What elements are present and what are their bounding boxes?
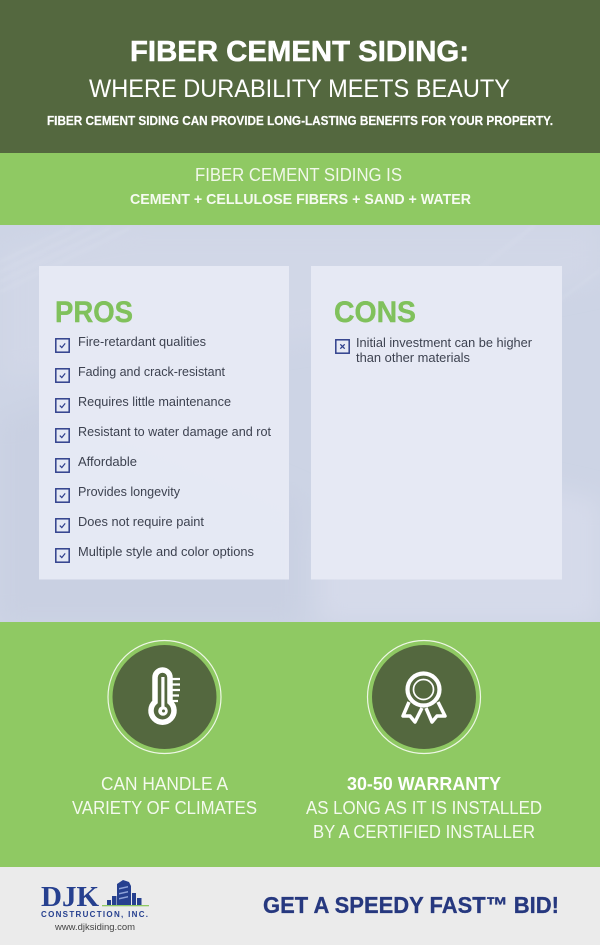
climates caption: VARIETY OF CLIMATES [72, 798, 257, 818]
climates caption: CAN HANDLE A [101, 774, 228, 794]
title: FIBER CEMENT SIDING: [130, 36, 469, 68]
panel: pros [39, 266, 289, 580]
icon: award ribbon [368, 640, 480, 754]
intro sentence: FIBER CEMENT SIDING CAN PROVIDE LONG-LASTING BENEFITS FOR YOUR PROPERTY. [47, 114, 553, 128]
call to action: GET A SPEEDY FAST™ BID! [263, 892, 559, 918]
logo [41, 880, 149, 933]
logo: CONSTRUCTION, INC. [41, 910, 148, 919]
cons item [336, 335, 533, 365]
subtitle: WHERE DURABILITY MEETS BEAUTY [89, 75, 510, 103]
warranty caption: 30-50 WARRANTY [347, 774, 501, 794]
pros list [56, 334, 271, 562]
warranty caption: BY A CERTIFIED INSTALLER [313, 822, 535, 842]
cons heading: CONS [334, 296, 416, 329]
cons item: than other materials [356, 350, 470, 365]
composition heading: FIBER CEMENT SIDING IS [195, 164, 402, 185]
pros list: Provides longevity [78, 484, 180, 499]
composition formula: CEMENT + CELLULOSE FIBERS + SAND + WATER [130, 191, 471, 208]
pros list: Fire-retardant qualities [78, 334, 206, 349]
warranty caption: AS LONG AS IT IS INSTALLED [306, 798, 542, 818]
benefits band [0, 622, 600, 867]
pros list: Fading and crack-resistant [78, 364, 225, 379]
warranty caption [306, 774, 542, 842]
pros list: Does not require paint [78, 514, 204, 529]
composition band [0, 153, 600, 225]
header panel [0, 0, 600, 153]
footer [0, 867, 600, 945]
icon: building [107, 880, 142, 905]
pros heading: PROS [55, 296, 133, 329]
climates caption [72, 774, 257, 818]
pros list: Affordable [78, 454, 137, 469]
cons item: Initial investment can be higher [356, 335, 533, 350]
panel: cons [311, 266, 562, 580]
icon: thermometer [108, 640, 221, 754]
pros list: Resistant to water damage and rot [78, 424, 271, 439]
pros list: Requires little maintenance [78, 394, 231, 409]
logo: www.djksiding.com [54, 922, 135, 933]
pros list: Multiple style and color options [78, 544, 254, 559]
background: siding photo [0, 225, 600, 622]
logo: DJK [41, 882, 99, 913]
